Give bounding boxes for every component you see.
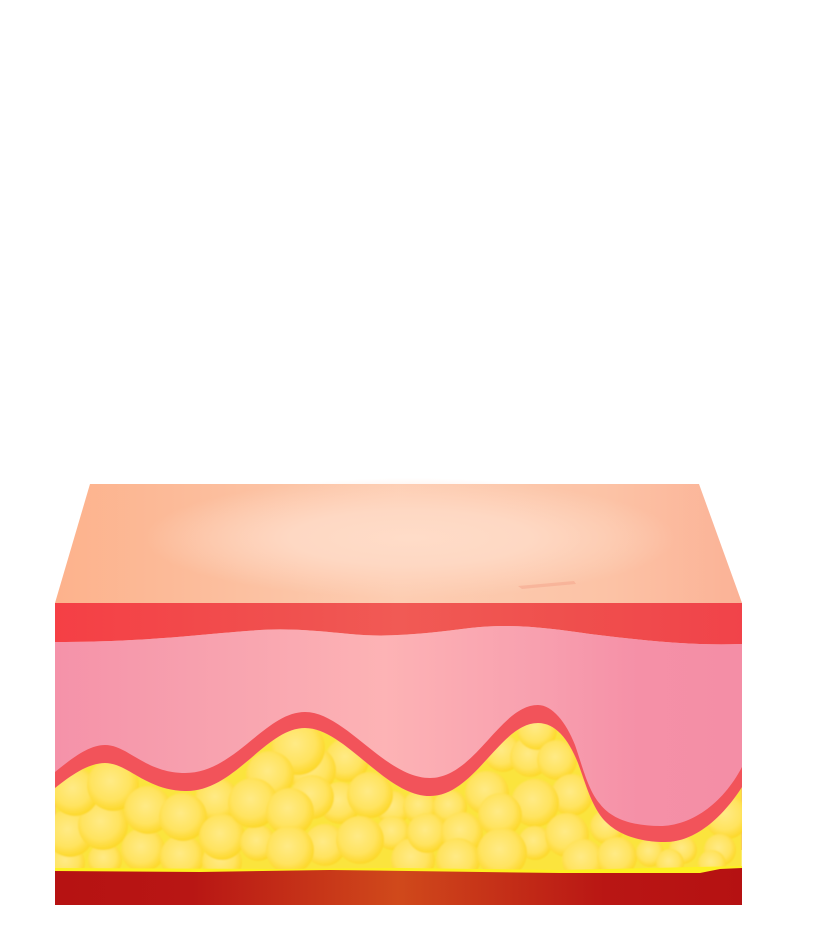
wavy red membrane bbox=[55, 705, 742, 842]
subcutaneous fat cells bbox=[55, 723, 742, 870]
skin cross-section illustration bbox=[55, 482, 742, 905]
top skin surface bbox=[55, 478, 742, 603]
dermis pink layer bbox=[55, 626, 742, 850]
muscle layer bbox=[55, 868, 742, 905]
yellow fat base line bbox=[55, 866, 742, 873]
epidermis red band bbox=[55, 603, 742, 644]
